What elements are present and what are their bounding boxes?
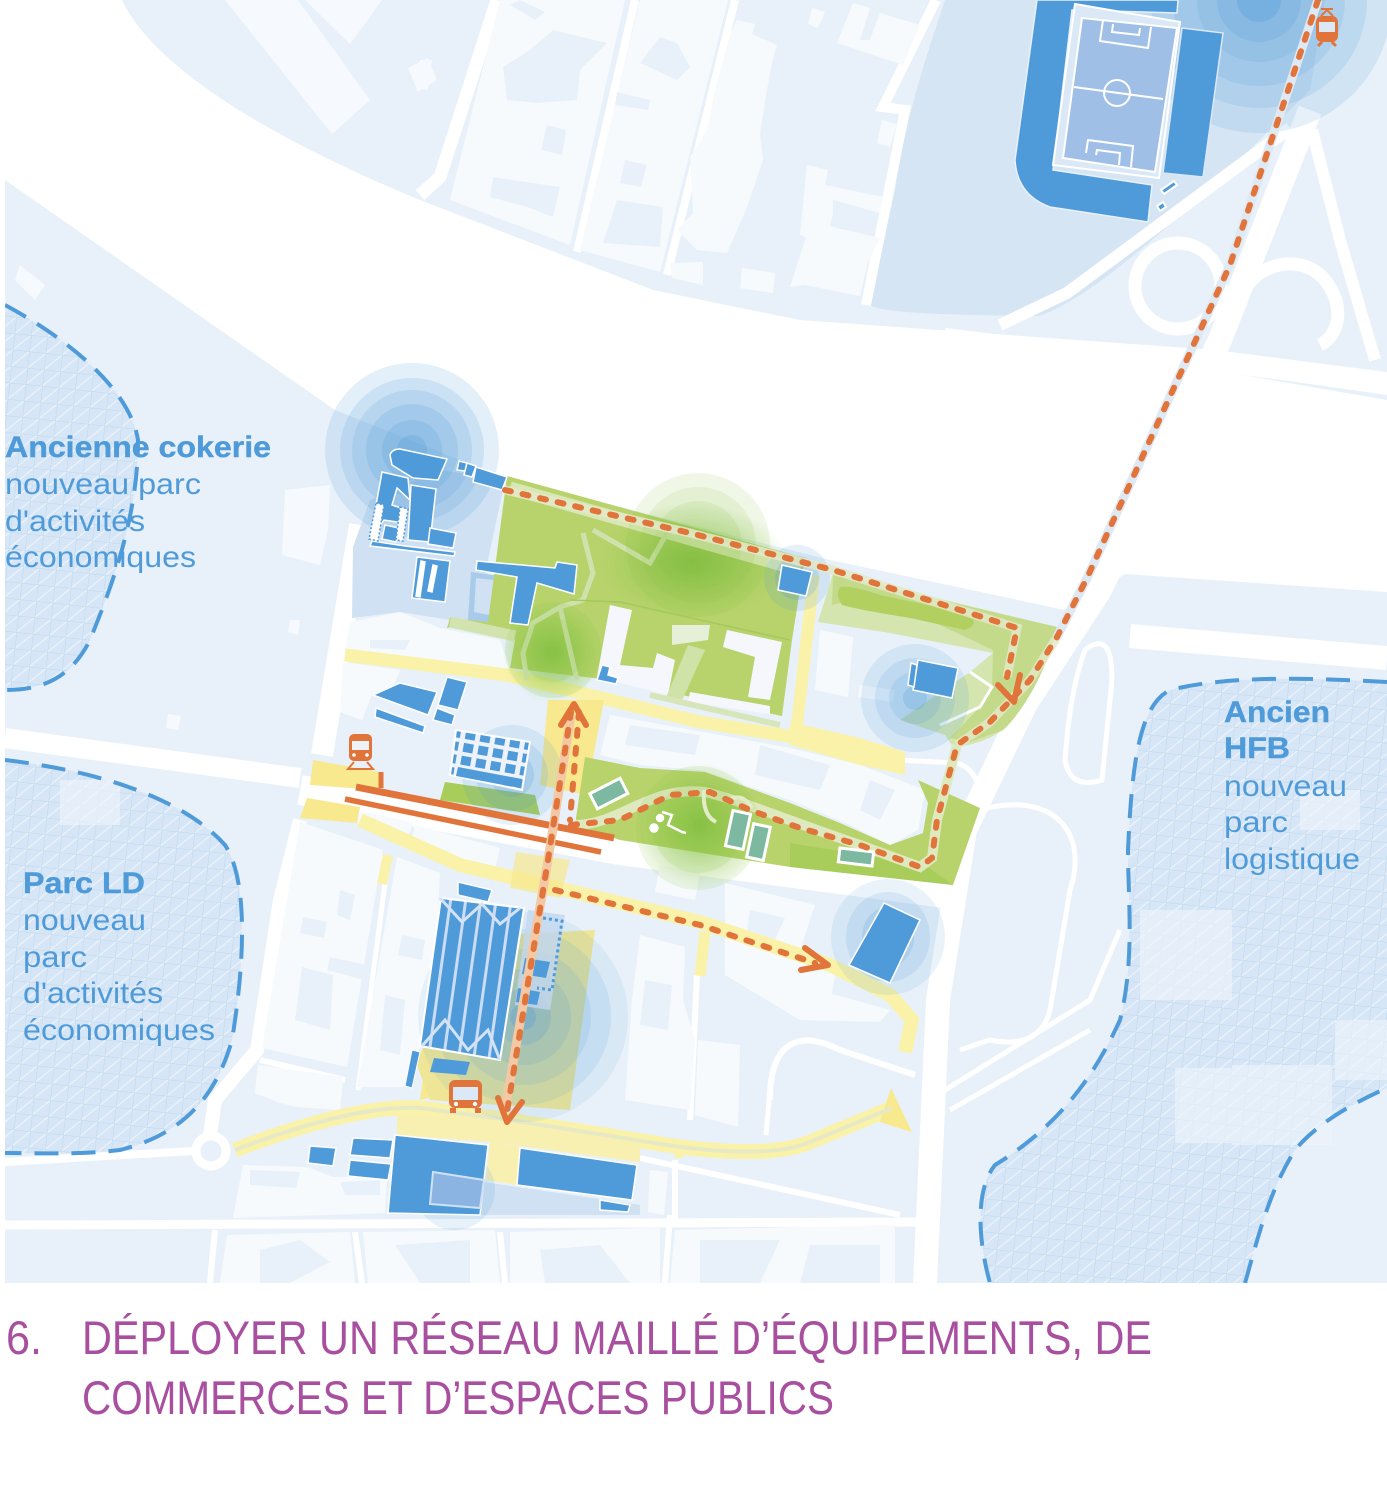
sports court wedge [940,672,992,725]
market block north [458,882,492,902]
T building [476,561,577,625]
south retail boxes [388,1135,488,1215]
title: DÉPLOYER UN RÉSEAU MAILLÉ D’ÉQUIPEMENTS, DE [82,1311,1152,1364]
white canal and rail corridor [5,0,1387,610]
stadium circle of influence [1126,0,1387,133]
west white patches [15,265,330,730]
parc LD hatched zone [5,760,242,1153]
icon: train [348,734,373,769]
green behind station block [440,782,540,815]
pool [474,578,494,615]
south pale ground [480,1182,640,1215]
darker green spots [617,509,779,606]
small courtyard block [597,665,618,684]
curved path stub [704,790,752,822]
label: parc LD: d'activités [23,977,163,1010]
park lawn [447,476,805,716]
bottom street median [235,1108,892,1152]
stadium [1015,0,1223,222]
sports hall [913,660,958,698]
small park building [778,565,812,596]
south linear park [575,745,980,887]
skate icon [650,812,686,833]
east park light lawn [818,573,1057,747]
blue buildings [308,449,958,1215]
ancien HFB hatched zone [980,679,1387,1283]
east park mid lawn [832,575,1057,742]
market hall [405,898,565,1088]
label: ancienne cokerie: d'activités [5,505,145,538]
pool frame [468,572,494,622]
label: ancienne cokerie: économiques [5,541,196,574]
holes in centre and south housing [250,640,895,1283]
label: parc LD: nouveau [23,904,146,937]
orange station bars [345,772,614,852]
label: parc LD [23,867,215,1047]
mosaic block lower strip [456,767,522,788]
yellow squares [300,700,912,1185]
ancienne cokerie hatched zone [5,305,138,690]
label: ancien HFB: logistique [1224,843,1360,876]
pale blue institutional ground [352,470,505,625]
pale patches in hatched zones [60,780,1387,1145]
housing blocks north [450,0,920,296]
central blocks [373,683,437,715]
label: parc LD: économiques [23,1014,215,1047]
yellow streets [235,575,912,1158]
label: ancien HFB [1224,696,1360,876]
pitch [1063,18,1177,172]
label: parc LD: parc [23,941,87,974]
east hall [849,903,920,983]
north park [447,476,805,725]
label: ancienne cokerie [5,431,271,574]
label: ancienne cokerie: nouveau parc [5,468,201,501]
cokerie office complex [369,449,507,556]
pitch surround [1053,4,1180,178]
stand horseshoe [1015,0,1178,222]
title: 6. [6,1311,42,1364]
label: ancien HFB: parc [1224,806,1288,839]
route underlay [505,490,1057,745]
park paths [510,488,800,570]
zone outlines [5,305,1387,1283]
blue circles of influence [325,363,969,1230]
holes in north housing blocks [490,0,850,247]
stadium district background [870,0,1325,316]
icon: bus [449,1080,482,1113]
label: ancien HFB: HFB [1224,732,1290,765]
sport fields in linear park [590,778,874,866]
label: ancien HFB: Ancien [1224,696,1330,729]
white courtyard buildings [597,605,675,695]
sports hall annex [908,663,917,687]
title [6,1311,1152,1424]
icon: tram [1316,9,1338,46]
east stand [1163,28,1223,177]
label: ancien HFB: nouveau [1224,770,1347,803]
north-west large buildings [225,0,437,134]
east park [818,573,1057,747]
retail courtyard [430,1172,484,1208]
mosaic housing block [450,730,530,790]
housing blocks centre and south [220,612,925,1283]
pedestrian routes dashed [505,0,1318,1112]
north annex [412,557,450,602]
roundabout [196,1136,226,1166]
arrows [498,675,1020,1122]
east park dark lawn [838,587,974,630]
title: COMMERCES ET D’ESPACES PUBLICS [82,1371,834,1424]
label: parc LD: Parc LD [23,867,145,900]
green circles of influence [505,473,770,890]
label: ancienne cokerie: Ancienne cokerie [5,431,271,464]
